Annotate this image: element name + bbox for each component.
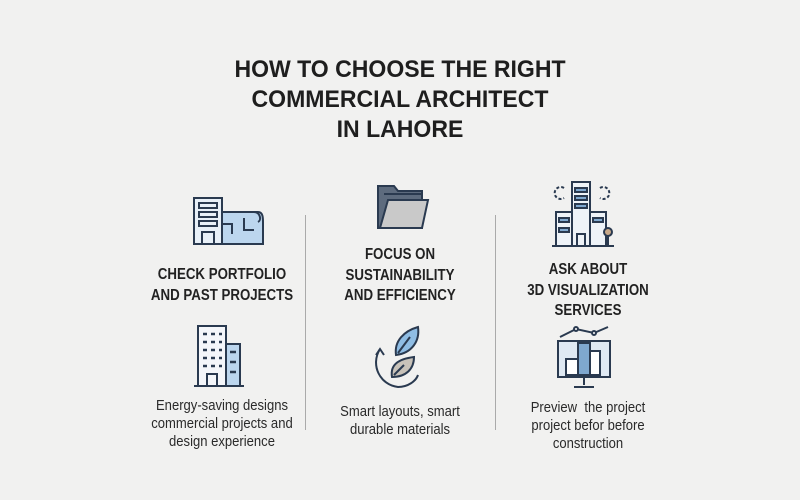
heading: ASK ABOUT <box>549 261 627 278</box>
panel: portfolio <box>151 197 293 450</box>
icon: folder <box>377 185 430 229</box>
heading: SUSTAINABILITY <box>346 266 454 284</box>
body text: construction <box>553 436 623 452</box>
body text: Preview the project <box>531 400 645 416</box>
heading: CHECK PORTFOLIO <box>158 266 286 283</box>
title: COMMERCIAL ARCHITECT <box>252 86 548 113</box>
body text: project befor before <box>531 418 645 434</box>
panel: 3D visualization <box>527 181 649 452</box>
body text <box>531 400 646 452</box>
heading <box>344 246 456 304</box>
body text: Energy-saving designs <box>156 398 288 414</box>
heading: 3D VISUALIZATION <box>527 282 649 298</box>
icon: office tower <box>194 325 244 387</box>
icon: monitor with building <box>557 326 611 388</box>
body text <box>340 404 460 438</box>
heading: AND PAST PROJECTS <box>151 286 293 304</box>
title: HOW TO CHOOSE THE RIGHT <box>234 56 566 83</box>
heading: SERVICES <box>555 302 621 319</box>
icon: building blueprint <box>193 197 264 245</box>
body text: durable materials <box>350 422 450 438</box>
body text: design experience <box>169 434 275 450</box>
heading: FOCUS ON <box>365 246 435 263</box>
body text <box>151 398 293 450</box>
body text: Smart layouts, smart <box>340 404 460 420</box>
icon: tower with arrows <box>552 181 614 247</box>
heading <box>151 266 293 304</box>
heading: AND EFFICIENCY <box>344 287 456 304</box>
heading <box>527 261 649 319</box>
icon: leaves cycle <box>375 326 420 388</box>
panel: sustainability <box>340 185 460 438</box>
body text: commercial projects and <box>151 416 293 432</box>
title: IN LAHORE <box>337 116 463 143</box>
title <box>234 56 566 143</box>
